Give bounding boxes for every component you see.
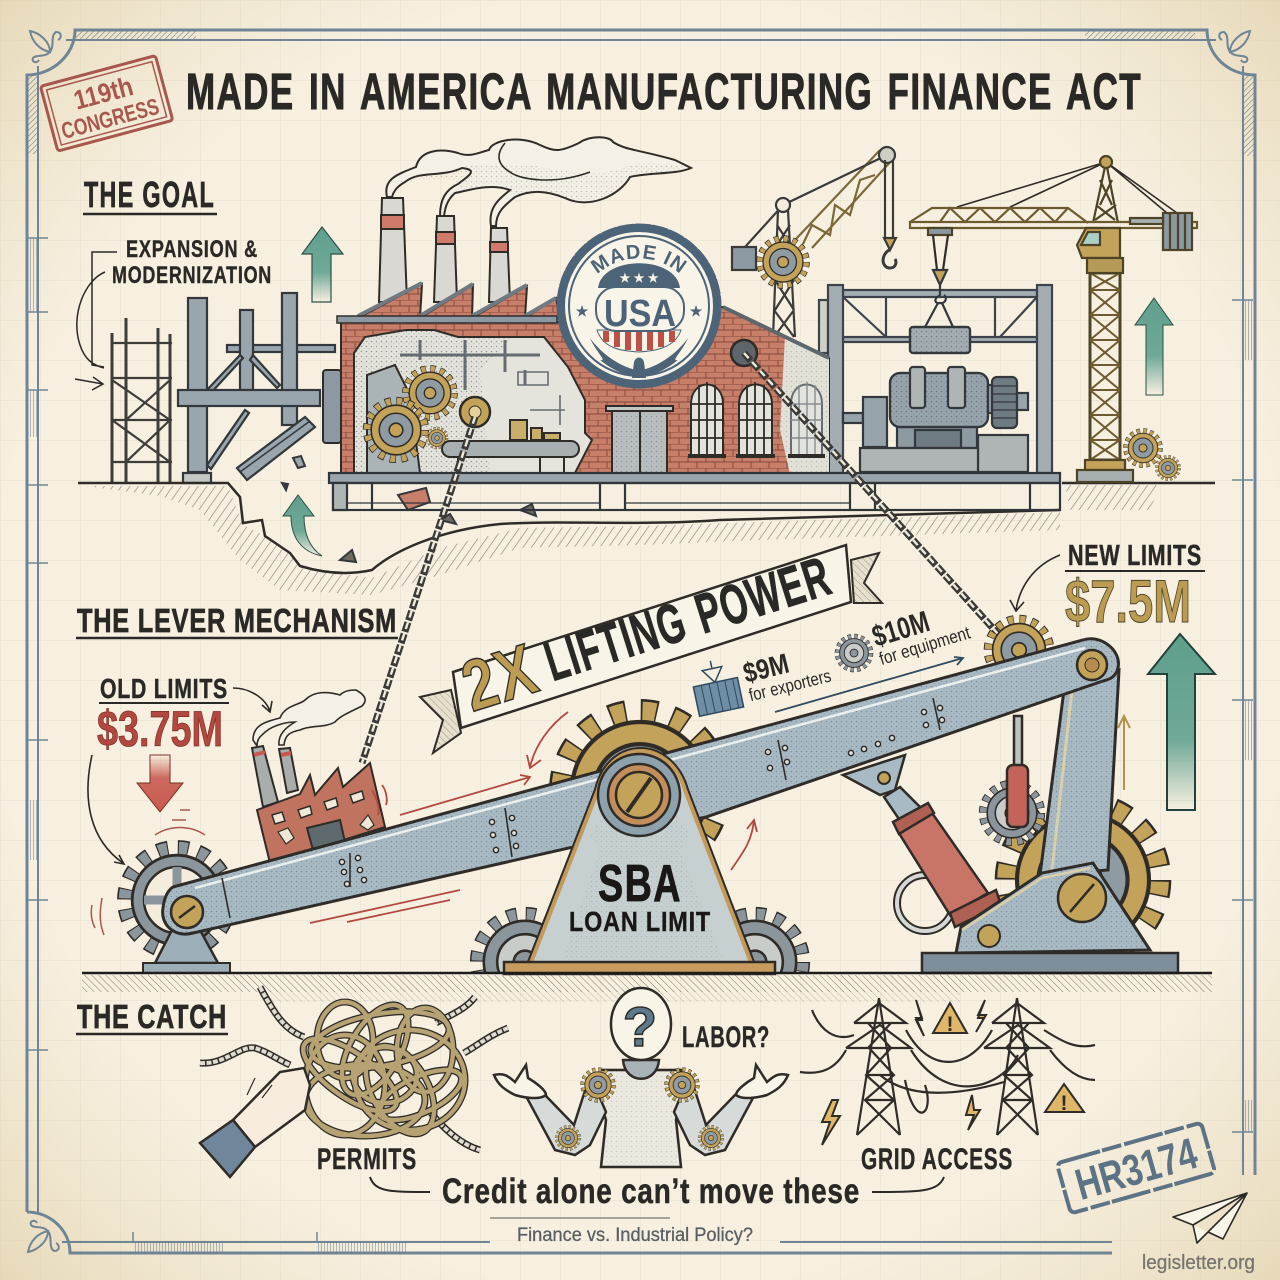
left drum (323, 370, 341, 443)
arrow: upward along lever (775, 657, 963, 712)
warning marks: ! (946, 1013, 954, 1036)
text: 9M for exporters: $9M (740, 648, 792, 689)
curved arrow to left gear (88, 755, 124, 864)
saw-tooth roof (358, 283, 560, 318)
old limits: $3.75M (97, 701, 223, 757)
banner: 2X lifting power: 2X (453, 629, 547, 727)
chimneys (379, 198, 510, 302)
warning marks: ! (1060, 1092, 1068, 1115)
platform (329, 473, 1060, 510)
fulcrum bolt (598, 754, 680, 836)
new limits: NEW LIMITS (1068, 540, 1202, 572)
text: 10M for equipment: for equipment (877, 622, 973, 669)
new limits (1010, 540, 1205, 635)
arrow: crane up (1135, 298, 1173, 395)
steel gantry (819, 285, 1052, 473)
small factory on lever (252, 746, 385, 863)
banner: 2X lifting power: LIFTING POWER (537, 544, 838, 693)
figure: faceless worker (494, 988, 788, 1167)
brick walls (341, 307, 829, 474)
hanging load (910, 270, 970, 353)
badge: Made in USA (556, 224, 722, 388)
text: 9M for exporters (740, 638, 833, 705)
rope knot (200, 987, 508, 1150)
rivets (339, 705, 945, 887)
arrow: new limits up (1148, 634, 1215, 810)
gears behind the lever (479, 714, 1157, 1008)
windows (688, 382, 825, 456)
text: 9M for exporters: for exporters (747, 666, 833, 705)
container icon: exporters (689, 656, 744, 716)
ground line and hatching (82, 973, 1212, 1002)
small smoke (253, 690, 365, 746)
badge: Made in USA: ★ ★ ★ (620, 271, 659, 285)
chain: factory to small factory (362, 417, 475, 763)
banner: 2X lifting power (420, 536, 882, 753)
arrow: old limits down (137, 755, 183, 812)
site credit: legisletter.org (1142, 1252, 1255, 1274)
fulcrum base (504, 962, 775, 974)
old limits: OLD LIMITS (100, 673, 228, 704)
machine (843, 367, 1028, 472)
right column (1040, 670, 1119, 875)
gears: crane base (1126, 431, 1179, 479)
crane: right (910, 156, 1197, 482)
text: 10M for equipment: $10M (868, 605, 934, 654)
footer divider and question: Finance vs. Industrial Policy? (517, 1225, 753, 1246)
arrow: rising from crater (283, 495, 322, 556)
label: expansion and modernization: EXPANSION & (126, 236, 258, 263)
ground and crater (78, 483, 1215, 595)
crane: left (732, 147, 896, 337)
stamp: 119th Congress: CONGRESS (58, 93, 162, 144)
badge: Made in USA: USA (604, 293, 676, 335)
conveyor (442, 420, 579, 473)
heading: the lever mechanism: THE LEVER MECHANISM (77, 602, 397, 639)
fulcrum label: SBA (598, 855, 682, 913)
stamp: 119th Congress (40, 56, 173, 151)
right base (956, 863, 1150, 953)
small gold top gear (989, 620, 1049, 680)
stamp: HR3174: HR3174 (1070, 1129, 1203, 1210)
chain: factory to lever (744, 353, 1008, 645)
power towers (800, 998, 1095, 1135)
icon: paper plane (1173, 1193, 1247, 1243)
hydraulic ring (897, 875, 953, 931)
hydraulic cylinder (884, 787, 1001, 927)
heading: the catch: THE CATCH (77, 998, 227, 1035)
warning marks (946, 1013, 1068, 1115)
label: labor: LABOR? (682, 1021, 770, 1054)
steel frame and beams (178, 293, 335, 483)
new limits: $7.5M (1065, 568, 1191, 635)
scaffold (112, 318, 172, 482)
main beam (163, 639, 1118, 934)
fulcrum label: LOAN LIMIT (569, 906, 711, 937)
gear icon: equipment (838, 637, 870, 669)
grey gear, right (984, 785, 1040, 841)
factory (323, 198, 829, 474)
badge: Made in USA: MADE IN (590, 244, 687, 274)
label: expansion and modernization (75, 236, 272, 390)
old limits (97, 673, 272, 757)
interior gears (407, 370, 453, 416)
small piston (1007, 716, 1028, 827)
pulley wheel (731, 340, 757, 366)
hand (200, 1068, 310, 1177)
takeaway with brackets: Credit alone can’t move these (442, 1172, 860, 1211)
red motion arrows (310, 712, 757, 923)
label: grid access: GRID ACCESS (861, 1143, 1013, 1176)
stamp: 119th Congress: 119th (71, 71, 136, 116)
cutaway interior (354, 330, 592, 473)
label: expansion and modernization: MODERNIZATION (112, 262, 272, 289)
beam end bolts (171, 896, 203, 928)
fulcrum (530, 751, 752, 965)
lever assembly (127, 620, 1178, 1008)
figure gears (557, 1070, 722, 1149)
text: 10M for equipment (868, 595, 973, 669)
fulcrum label (569, 855, 711, 937)
heading: the goal (83, 174, 217, 215)
wobble marks above left gear (91, 810, 205, 935)
door (606, 406, 673, 474)
rubble (282, 456, 536, 562)
label: permits: PERMITS (317, 1143, 417, 1176)
gear: left crane (760, 240, 806, 284)
smoke clouds (386, 137, 691, 226)
warning signs and sparks (822, 1000, 1084, 1145)
heading: the goal: THE GOAL (84, 174, 215, 215)
badge: Made in USA: ★ (690, 303, 703, 319)
question mark: ? (623, 995, 657, 1058)
bracket below beam (843, 755, 905, 795)
left gear (127, 850, 230, 973)
badge: Made in USA: ★ (576, 303, 589, 319)
arrow: goal up (302, 227, 343, 302)
arrow: small gold up (1118, 716, 1130, 790)
